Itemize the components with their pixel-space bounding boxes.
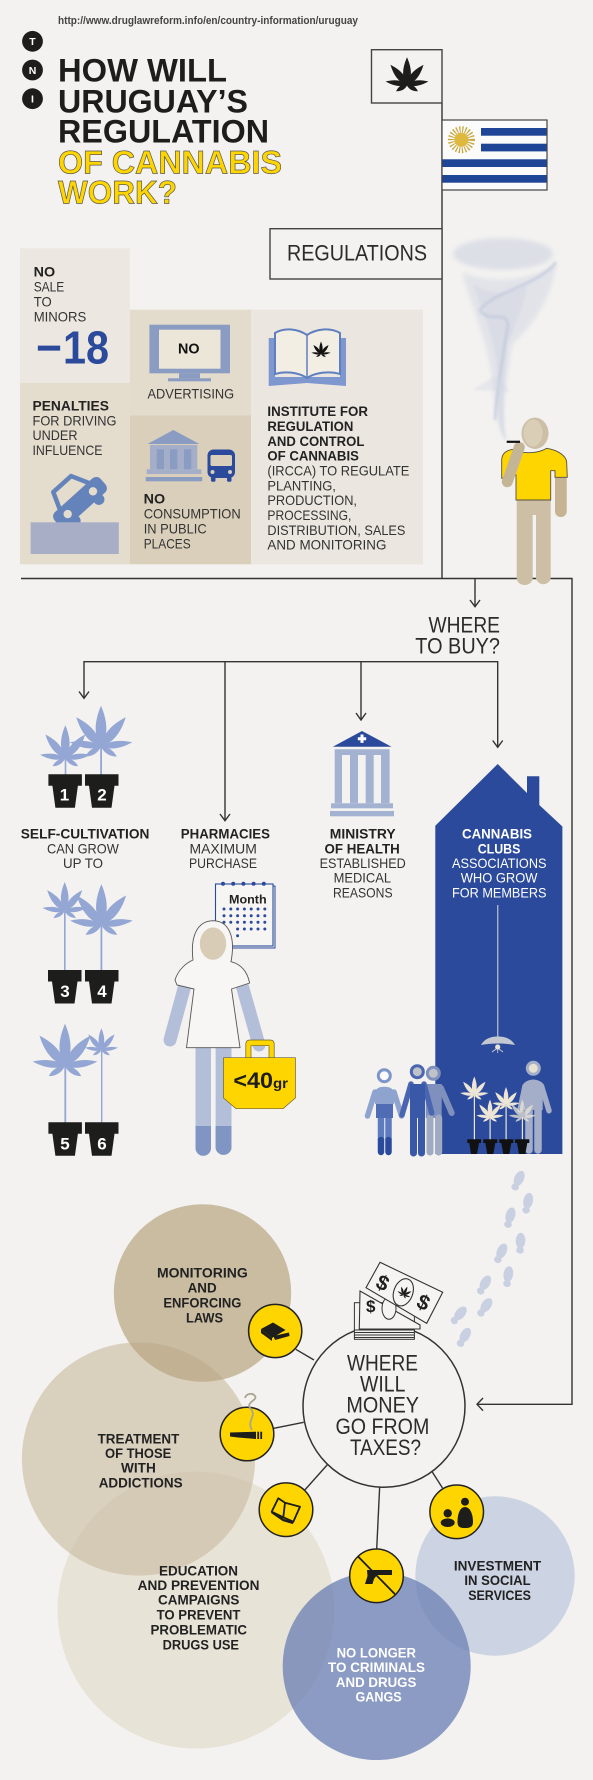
panel: no sale to minors: TO	[34, 294, 52, 310]
plants 3 and 4: 3	[60, 982, 70, 1001]
panel: institute IRCCA: PRODUCTION,	[267, 492, 357, 508]
text: self-cultivation	[21, 826, 149, 871]
panel: cannabis clubs house: CLUBS	[478, 841, 520, 856]
text: self-cultivation: UP TO	[63, 855, 103, 871]
panel: no advertising: ADVERTISING	[148, 385, 234, 401]
text: education: TO PREVENT	[157, 1608, 241, 1623]
heading box: regulations	[270, 229, 442, 279]
heading: where to buy	[415, 612, 500, 658]
panel: no sale to minors: −	[36, 321, 62, 373]
panel: no sale to minors: 18	[63, 321, 109, 373]
title: OF CANNABIS	[58, 144, 282, 180]
panel: penalties	[20, 383, 130, 564]
panel: cannabis clubs house: ASSOCIATIONS	[452, 855, 546, 871]
icon: monthly calendar	[216, 882, 275, 948]
panel: institute IRCCA: PLANTING,	[267, 477, 336, 493]
connector lines	[21, 103, 572, 1411]
plants 5 and 6: 5	[60, 1134, 70, 1154]
icon: law book	[249, 1304, 302, 1358]
panel: no consumption in public places: IN PUBLIC	[144, 520, 207, 536]
logo: TNI: I	[31, 94, 34, 106]
central circle: where will money go from taxes: MONEY	[346, 1393, 419, 1418]
logo: TNI	[22, 31, 43, 109]
text: pharmacies: PURCHASE	[189, 855, 257, 871]
title	[58, 53, 282, 211]
icon: banknotes	[354, 1262, 443, 1339]
circle: investment in social services	[415, 1496, 575, 1656]
illustration: smoke	[453, 238, 557, 442]
icon: Uruguay flag	[442, 120, 547, 190]
panel: institute IRCCA: AND MONITORING	[267, 537, 386, 553]
icon: ministry of health building	[330, 731, 394, 816]
icon: open book	[269, 329, 346, 386]
icon: shopping bag under 40 grams: gr	[273, 1075, 289, 1091]
footprints	[448, 1169, 534, 1349]
source url: http://www.druglawreform.info/en/country-information/uruguay	[58, 15, 359, 27]
text: monitoring: AND	[188, 1280, 217, 1295]
icon: cannabis leaf box	[372, 50, 442, 103]
text: self-cultivation: CAN GROW	[47, 840, 120, 856]
icon: grow lamp	[481, 905, 515, 1053]
text: ministry of health: MINISTRY	[330, 826, 396, 841]
logo: TNI: T	[29, 36, 36, 48]
central circle: where will money go from taxes: GO FROM	[336, 1414, 429, 1439]
panel: institute IRCCA: DISTRIBUTION, SALES	[267, 522, 405, 538]
text: investment: IN SOCIAL	[464, 1573, 531, 1588]
self-cultivation: plants 1 and 2: 2	[97, 786, 107, 804]
text: ministry of health: OF HEALTH	[324, 841, 400, 856]
text: ministry of health: REASONS	[333, 884, 393, 900]
icon: joint	[220, 1394, 274, 1461]
icon: shopping bag under 40 grams	[224, 1040, 295, 1109]
plants 5 and 6	[32, 1024, 118, 1156]
text: monitoring	[157, 1266, 248, 1325]
text: education: EDUCATION	[159, 1563, 238, 1578]
icon: monthly calendar: Month	[229, 892, 267, 906]
icon: tilted car	[40, 463, 114, 535]
text: no longer to criminals: TO CRIMINALS	[328, 1660, 425, 1675]
panel: no sale to minors: NO	[34, 265, 55, 280]
self-cultivation: plants 1 and 2: 1	[60, 786, 69, 804]
panel: no consumption in public places: NO	[144, 492, 165, 507]
text: no longer to criminals	[328, 1645, 425, 1705]
person: pale member	[520, 1062, 549, 1150]
spokes from central circle	[274, 1349, 442, 1549]
central circle: where will money go from taxes: WILL	[360, 1372, 405, 1397]
circle: treatment of addictions	[22, 1342, 255, 1576]
text: no longer to criminals: AND DRUGS	[336, 1675, 416, 1690]
panel: institute IRCCA: AND CONTROL	[267, 434, 364, 449]
text: no longer to criminals: GANGS	[356, 1690, 402, 1705]
panel: cannabis clubs house	[435, 764, 562, 1154]
icon: banknotes: $	[372, 1271, 393, 1296]
panel: no sale to minors: MINORS	[34, 308, 86, 324]
text: treatment	[98, 1431, 183, 1490]
icon: shopping bag under 40 grams: <40	[233, 1068, 273, 1093]
person: dark member	[402, 1066, 432, 1153]
heading box: regulations: REGULATIONS	[287, 241, 427, 266]
self-cultivation: plants 1 and 2	[40, 706, 133, 808]
icon: banknotes: $	[413, 1290, 434, 1316]
panel: no sale to minors	[20, 248, 130, 383]
panel: cannabis clubs house: FOR MEMBERS	[452, 884, 546, 900]
text: education: AND PREVENTION	[138, 1578, 260, 1593]
panel: penalties: PENALTIES	[32, 398, 109, 413]
plants	[460, 1077, 536, 1140]
text: education: PROBLEMATIC	[150, 1622, 247, 1637]
text: investment: INVESTMENT	[454, 1558, 542, 1573]
panel: no consumption in public places: CONSUMPTION	[144, 506, 241, 522]
panel: no consumption in public places	[130, 415, 251, 564]
panel: institute IRCCA: REGULATION	[267, 419, 353, 434]
icon: family	[430, 1485, 484, 1539]
illustration: club members and plants	[368, 1062, 549, 1154]
logo: TNI: N	[29, 65, 36, 77]
text: treatment: OF THOSE	[105, 1446, 171, 1461]
title: URUGUAY’S	[58, 83, 248, 119]
text: self-cultivation: SELF-CULTIVATION	[21, 826, 149, 841]
panel: penalties: INFLUENCE	[32, 442, 102, 458]
text: monitoring: ENFORCING	[163, 1295, 241, 1310]
text: treatment: WITH	[121, 1461, 156, 1476]
central circle: where will money go from taxes: TAXES?	[350, 1435, 421, 1460]
illustration: man smoking	[502, 418, 567, 585]
title: REGULATION	[58, 114, 269, 150]
panel: institute IRCCA: PROCESSING,	[267, 507, 351, 523]
central circle: where will money go from taxes	[303, 1325, 465, 1487]
panel: cannabis clubs house: CANNABIS	[462, 826, 532, 841]
panel: institute IRCCA: INSTITUTE FOR	[267, 404, 368, 419]
circle: no longer to criminals	[283, 1572, 471, 1760]
icon: banknotes: $	[366, 1297, 376, 1316]
panel: no sale to minors: SALE	[34, 279, 64, 295]
person: tall member right behind	[426, 1067, 452, 1152]
circle: monitoring and enforcing laws	[114, 1204, 291, 1382]
icon: no guns	[350, 1549, 403, 1603]
text: monitoring: MONITORING	[157, 1266, 248, 1281]
text: ministry of health: ESTABLISHED	[320, 855, 406, 871]
plants 5 and 6: 6	[97, 1134, 107, 1154]
central circle: where will money go from taxes: WHERE	[347, 1351, 418, 1376]
panel: institute IRCCA: OF CANNABIS	[267, 449, 359, 464]
text: investment: SERVICES	[468, 1588, 531, 1603]
text: no longer to criminals: NO LONGER	[337, 1645, 416, 1660]
text: pharmacies: MAXIMUM	[190, 840, 257, 856]
panel: penalties: FOR DRIVING	[32, 412, 116, 428]
text: treatment: ADDICTIONS	[99, 1475, 183, 1490]
text: education: CAMPAIGNS	[158, 1593, 239, 1608]
plants 3 and 4: 4	[97, 982, 107, 1001]
title: HOW WILL	[58, 53, 227, 89]
text: pharmacies: PHARMACIES	[181, 826, 270, 841]
person: light figure	[368, 1070, 402, 1152]
panel: institute IRCCA: (IRCCA) TO REGULATE	[267, 462, 409, 478]
plants 3 and 4	[42, 882, 133, 1004]
text: education	[138, 1563, 260, 1652]
text: treatment: TREATMENT	[98, 1431, 180, 1446]
title: WORK?	[58, 175, 177, 211]
text: education: DRUGS USE	[163, 1637, 239, 1652]
panel: cannabis clubs house: WHO GROW	[461, 870, 538, 886]
text: pharmacies	[181, 826, 270, 871]
panel: no consumption in public places: PLACES	[144, 535, 191, 551]
panel: no advertising	[130, 310, 251, 415]
text: investment	[454, 1558, 542, 1603]
icon: bus	[208, 450, 235, 482]
icon: public building	[146, 430, 202, 481]
heading: where to buy: WHERE	[428, 612, 500, 637]
icon: open book	[259, 1483, 313, 1536]
icon: monitor: NO	[178, 340, 200, 357]
panel: institute IRCCA	[251, 310, 423, 564]
text: monitoring: LAWS	[186, 1310, 223, 1325]
circle: education and prevention	[58, 1472, 334, 1748]
panel: penalties: UNDER	[32, 427, 78, 443]
heading: where to buy: TO BUY?	[415, 633, 500, 658]
text: ministry of health: MEDICAL	[334, 870, 391, 886]
text: ministry of health	[320, 826, 406, 900]
illustration: pharmacy customer	[170, 921, 259, 1156]
